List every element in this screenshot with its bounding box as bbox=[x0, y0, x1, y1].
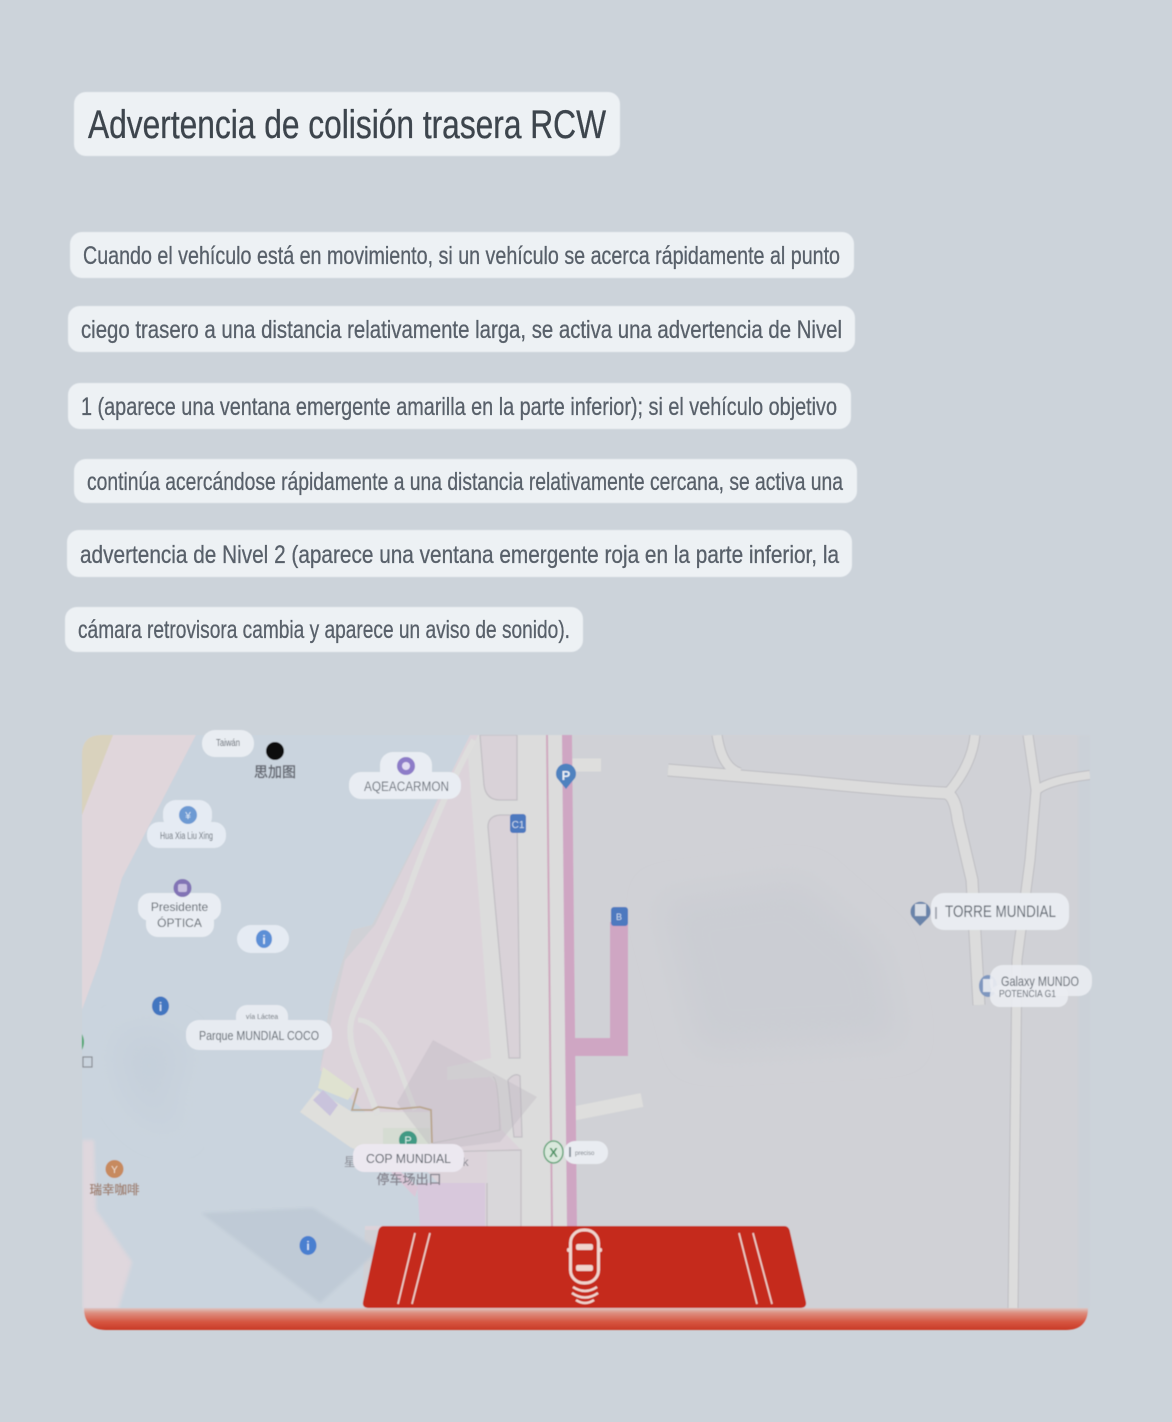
right lane lines bbox=[739, 1233, 772, 1304]
description text block: Cuando el vehículo está en movimiento, si un vehículo se acerca rápidamente al punto bbox=[83, 242, 840, 270]
label: vía Láctea and Parque MUNDIAL COCO: Parque MUNDIAL COCO bbox=[199, 1028, 319, 1043]
icon: info marker bbox=[152, 996, 169, 1016]
label: AQEACARMON bbox=[349, 752, 461, 799]
icon: parking marker: P bbox=[562, 768, 571, 783]
label: COP MUNDIAL parking: 停车场出口 bbox=[376, 1172, 442, 1187]
description text block: ciego trasero a una distancia relativamente larga, se activa una advertencia de Nivel bbox=[81, 316, 842, 344]
grey building overlay bbox=[397, 1040, 537, 1150]
label: COP MUNDIAL parking: COP MUNDIAL bbox=[366, 1151, 451, 1166]
label: COP MUNDIAL parking bbox=[344, 1131, 470, 1187]
label: AQEACARMON: AQEACARMON bbox=[364, 779, 449, 794]
label: TORRE MUNDIAL: TORRE MUNDIAL bbox=[945, 902, 1056, 921]
description text block: continúa acercándose rápidamente a una distancia relativamente cercana, se activa una bbox=[87, 468, 843, 496]
icon: info pill bbox=[237, 925, 289, 953]
roads bbox=[350, 735, 1090, 1310]
icon: parking marker bbox=[556, 764, 576, 789]
label: Galaxy MUNDO POTENCIA G1: POTENCIA G1 bbox=[999, 988, 1056, 1000]
icon: info pill: i bbox=[262, 933, 266, 947]
label: orange coffee pin bbox=[89, 1160, 140, 1197]
label: metro station: preciso bbox=[575, 1151, 595, 1157]
label: vía Láctea and Parque MUNDIAL COCO bbox=[186, 1005, 332, 1050]
label: COP MUNDIAL parking: 星河 bbox=[344, 1155, 368, 1169]
label: orange coffee pin: Y bbox=[111, 1165, 118, 1176]
label: Galaxy MUNDO POTENCIA G1: Galaxy MUNDO bbox=[1001, 973, 1079, 989]
orange-brown building outline bbox=[352, 1088, 432, 1143]
title: Advertencia de colisión trasera RCW bbox=[88, 103, 606, 147]
icon: info marker: i bbox=[159, 1000, 162, 1014]
icon: green edge marker bbox=[82, 1034, 92, 1067]
infographic canvas bbox=[64, 92, 1092, 1331]
label: Hua Xia Liu Xing: Hua Xia Liu Xing bbox=[160, 831, 213, 842]
label: COP MUNDIAL parking: P bbox=[404, 1135, 412, 1147]
label: TORRE MUNDIAL bbox=[910, 893, 1069, 930]
curved local roads bbox=[350, 740, 642, 1115]
label: Presidente ÓPTICA: Presidente bbox=[151, 900, 209, 914]
route line bbox=[562, 735, 628, 1226]
map base terrain bbox=[82, 735, 1092, 1330]
label: Galaxy MUNDO POTENCIA G1 bbox=[979, 965, 1092, 1007]
description text block: 1 (aparece una ventana emergente amarilla en la parte inferior); si el vehículo objetivo bbox=[81, 393, 837, 421]
label: metro station bbox=[544, 1141, 608, 1164]
title bbox=[74, 92, 620, 156]
label: Hua Xia Liu Xing bbox=[147, 800, 226, 848]
label: Presidente ÓPTICA: ÓPTICA bbox=[157, 915, 202, 930]
icon: car with rear sound waves bbox=[567, 1230, 602, 1303]
label: Taiwán: Taiwán bbox=[216, 738, 240, 749]
left lane lines bbox=[398, 1233, 430, 1304]
icon: blue info marker lower: i bbox=[306, 1239, 310, 1253]
icon: B marker bbox=[611, 907, 628, 926]
label: Taiwán bbox=[202, 730, 254, 757]
icon: blue info marker lower bbox=[300, 1236, 316, 1255]
road islands bbox=[480, 735, 522, 1137]
upper right road surface bbox=[668, 735, 1090, 1310]
description text block: advertencia de Nivel 2 (aparece una ventana emergente roja en la parte inferior, la bbox=[80, 541, 839, 569]
red bottom strip bbox=[84, 1308, 1088, 1330]
upper right road casing bbox=[668, 735, 1090, 1310]
icon: C1 marker bbox=[510, 814, 526, 833]
icon: C1 marker: C1 bbox=[512, 820, 525, 831]
label: black brand pin: 思加图 bbox=[254, 764, 296, 780]
label: metro station: X bbox=[549, 1145, 558, 1160]
panel: map bbox=[82, 730, 1092, 1330]
red warning popup bbox=[363, 1226, 806, 1308]
description text block bbox=[65, 232, 857, 652]
label: orange coffee pin: 瑞幸咖啡 bbox=[89, 1182, 140, 1197]
description text block: cámara retrovisora cambia y aparece un aviso de sonido). bbox=[78, 616, 570, 644]
label: Presidente ÓPTICA bbox=[138, 879, 221, 937]
label: black brand pin bbox=[254, 742, 296, 780]
label: COP MUNDIAL parking: ark bbox=[452, 1155, 470, 1169]
label: vía Láctea and Parque MUNDIAL COCO: vía Láctea bbox=[246, 1014, 278, 1021]
icon: B marker: B bbox=[616, 912, 622, 922]
road divider lines bbox=[433, 1077, 521, 1226]
main road surface bbox=[469, 736, 566, 1226]
label: Hua Xia Liu Xing: ¥ bbox=[184, 811, 191, 822]
